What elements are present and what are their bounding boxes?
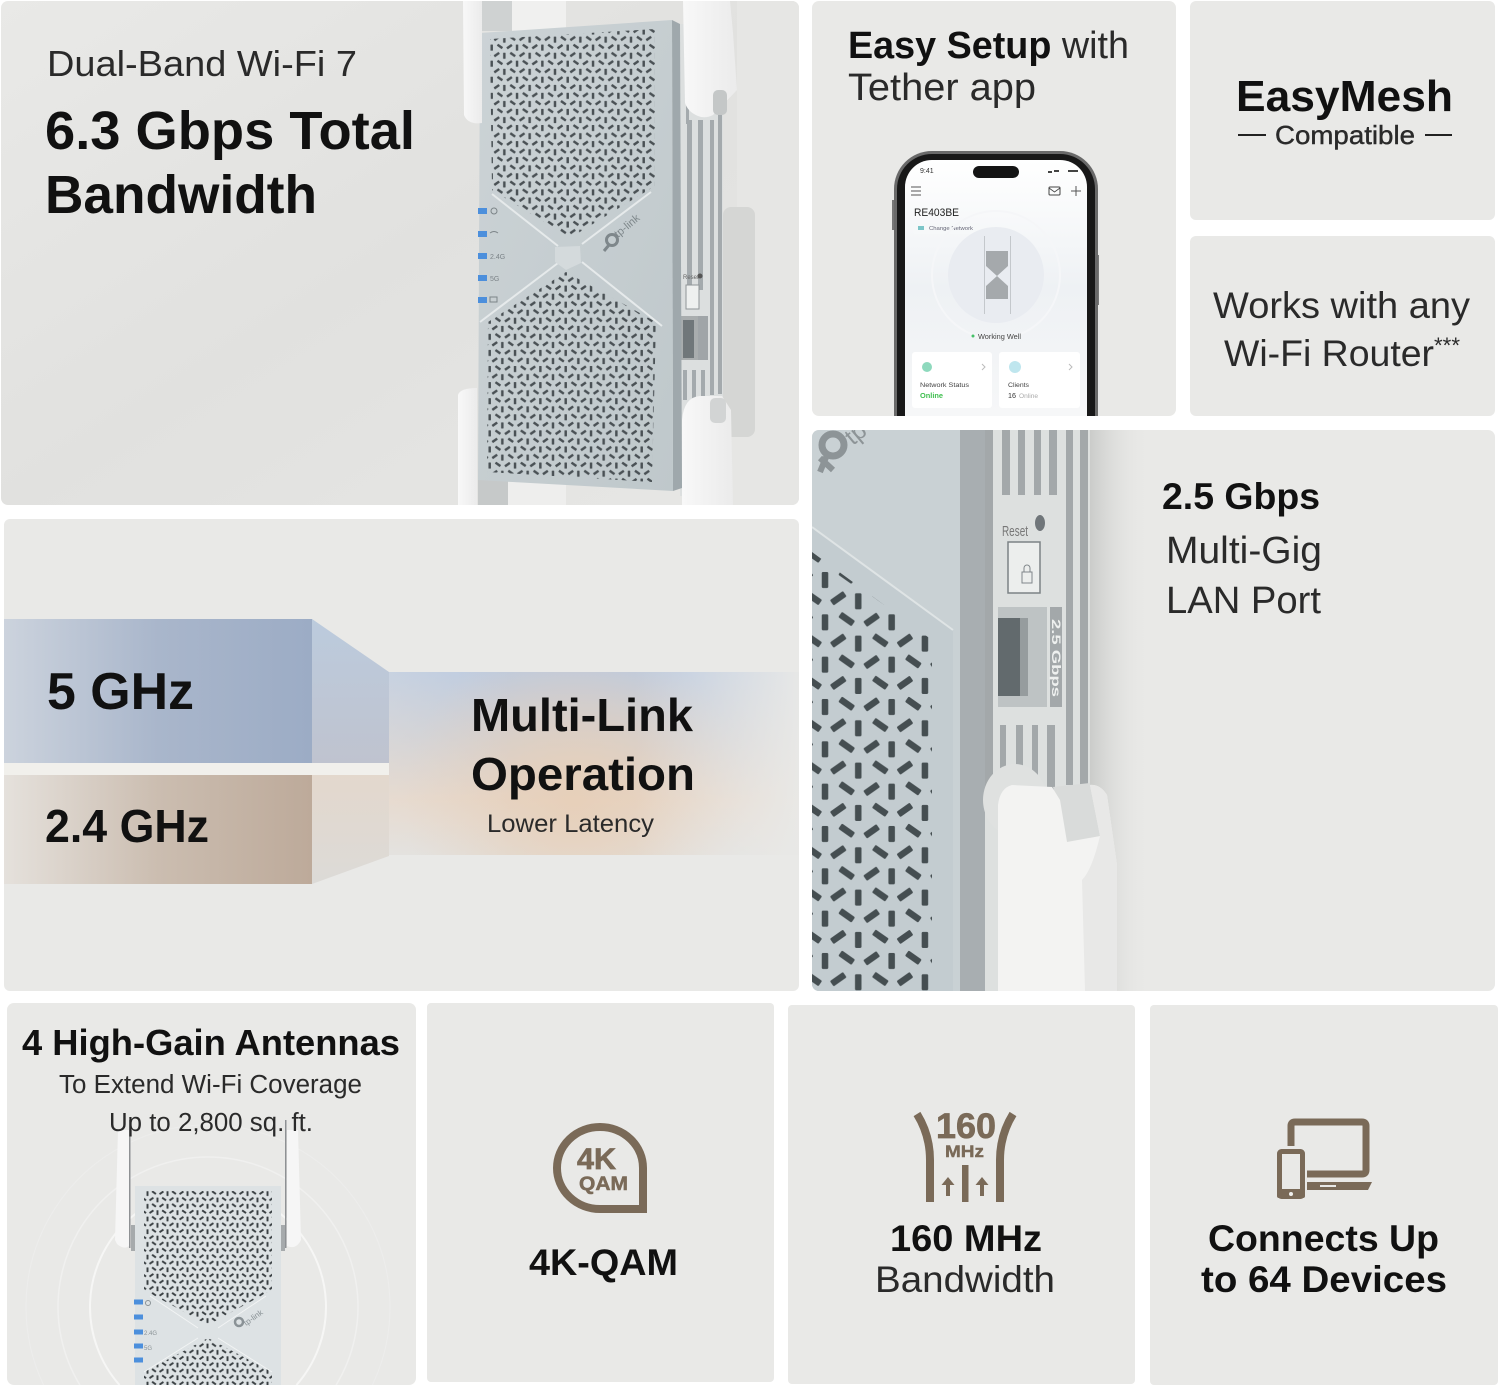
panel: EasyMesh compatible: EasyMesh [1236, 72, 1453, 121]
close-up front face and vents: tp [840, 417, 872, 451]
text: Tether app: Tether app [848, 67, 1036, 109]
panel: connects up to 64 devices: to 64 Devices [1201, 1259, 1447, 1300]
icon: 160 MHz channel: 160 [936, 1107, 996, 1146]
coverage rings [89, 1214, 327, 1385]
small extender illustration: 2.4G [144, 1331, 157, 1337]
phone mockup: Change Network [929, 226, 973, 232]
panel: EasyMesh compatible [1190, 1, 1495, 220]
panel: Works with any Wi-Fi Router: Works with any [1213, 285, 1471, 326]
2.4 GHz band block [4, 775, 389, 884]
merged link block [389, 672, 799, 855]
text: coverage description: Up to 2,800 sq. ft. [109, 1109, 313, 1137]
merged link block: Lower Latency [487, 810, 655, 838]
icon: laptop and phone [1277, 1122, 1372, 1198]
panel: 4K-QAM: 4K-QAM [529, 1242, 678, 1283]
close-up antenna [983, 764, 1117, 991]
heading: 2.5 Gbps: 2.5 Gbps [1162, 476, 1320, 517]
close-up side of extender: Reset [1002, 523, 1029, 540]
heading: 6.3 Gbps Total Bandwidth [45, 101, 415, 225]
LED indicators: 2.4G [490, 254, 505, 261]
merged link block: Operation [471, 748, 695, 800]
icon: 4K QAM badge: 4K [577, 1143, 616, 1176]
antennas [458, 1, 737, 505]
small extender illustration [115, 1120, 301, 1385]
extender front face [478, 20, 682, 491]
2.4 GHz band block: 2.4 GHz [45, 800, 209, 852]
close-up side of extender [985, 430, 1090, 991]
icon: 4K QAM badge [557, 1127, 643, 1209]
panel: Works with any Wi-Fi Router: *** [1434, 333, 1460, 358]
5 GHz band block: 5 GHz [47, 663, 194, 721]
panel: connects up to 64 devices [1150, 1005, 1498, 1385]
heading: 4 High-Gain Antennas: 4 High-Gain Antennas [22, 1022, 400, 1063]
text: Multi-Gig LAN Port: Multi-Gig [1166, 530, 1322, 572]
LED indicators [478, 208, 505, 303]
phone mockup: 9:41 [920, 168, 934, 175]
phone mockup: 16 [1008, 391, 1016, 400]
heading: Easy Setup with: Easy Setup with [848, 25, 1129, 67]
close-up side of extender: 2.5 Gbps [1049, 619, 1063, 697]
text: Multi-Gig LAN Port [1166, 530, 1322, 622]
LED indicators: 5G [490, 276, 499, 283]
extender front face: tp-link [612, 212, 643, 240]
side of extender with vents [680, 106, 723, 496]
panel: Works with any Wi-Fi Router: Wi-Fi Router [1224, 333, 1432, 374]
phone mockup: Online [1019, 394, 1039, 400]
panel: 2.5 Gbps Multi-Gig LAN port [812, 417, 1495, 991]
panel: Works with any Wi-Fi Router [1190, 236, 1495, 416]
panel: Easy Setup with Tether app [812, 1, 1176, 416]
heading: 6.3 Gbps Total Bandwidth: Bandwidth [45, 165, 317, 225]
phone mockup: Working Well [978, 334, 1021, 341]
panel: 4K-QAM [427, 1003, 774, 1382]
text: Dual-Band Wi-Fi 7: Dual-Band Wi-Fi 7 [47, 43, 357, 84]
small extender illustration: tp-link [242, 1307, 265, 1328]
icon: 4K QAM badge: QAM [579, 1174, 628, 1195]
icon: 160 MHz channel: MHz [945, 1142, 984, 1161]
text: coverage description: To Extend Wi-Fi Coverage [59, 1071, 362, 1099]
small extender illustration: 5G [144, 1346, 152, 1352]
panel: 160 MHz bandwidth: 160 MHz [890, 1218, 1042, 1259]
phone mockup: Network Status [920, 382, 970, 389]
text: Multi-Gig LAN Port: LAN Port [1166, 580, 1321, 622]
phone mockup: Online [920, 391, 943, 400]
icon: 160 MHz channel [917, 1107, 1013, 1202]
phone mockup: Clients [1008, 382, 1030, 389]
phone mockup [892, 151, 1099, 416]
close-up front face and vents [812, 417, 985, 991]
panel: EasyMesh compatible: Compatible [1275, 120, 1415, 150]
panel: Multi-Link Operation [4, 519, 799, 991]
text: coverage description [59, 1071, 362, 1137]
merged link block: Multi-Link [471, 689, 693, 741]
side of extender with vents: Reset [683, 275, 699, 281]
panel: connects up to 64 devices: Connects Up [1208, 1218, 1439, 1259]
heading: 6.3 Gbps Total Bandwidth: 6.3 Gbps Total [45, 101, 415, 161]
panel: 160 MHz bandwidth: Bandwidth [875, 1259, 1055, 1300]
phone mockup: RE403BE [914, 207, 959, 219]
panel: 4 high-gain antennas [7, 1003, 416, 1385]
5 GHz band block [4, 619, 389, 763]
panel: 6.3 Gbps total bandwidth [1, 1, 799, 505]
panel: 160 MHz bandwidth [788, 1005, 1135, 1384]
